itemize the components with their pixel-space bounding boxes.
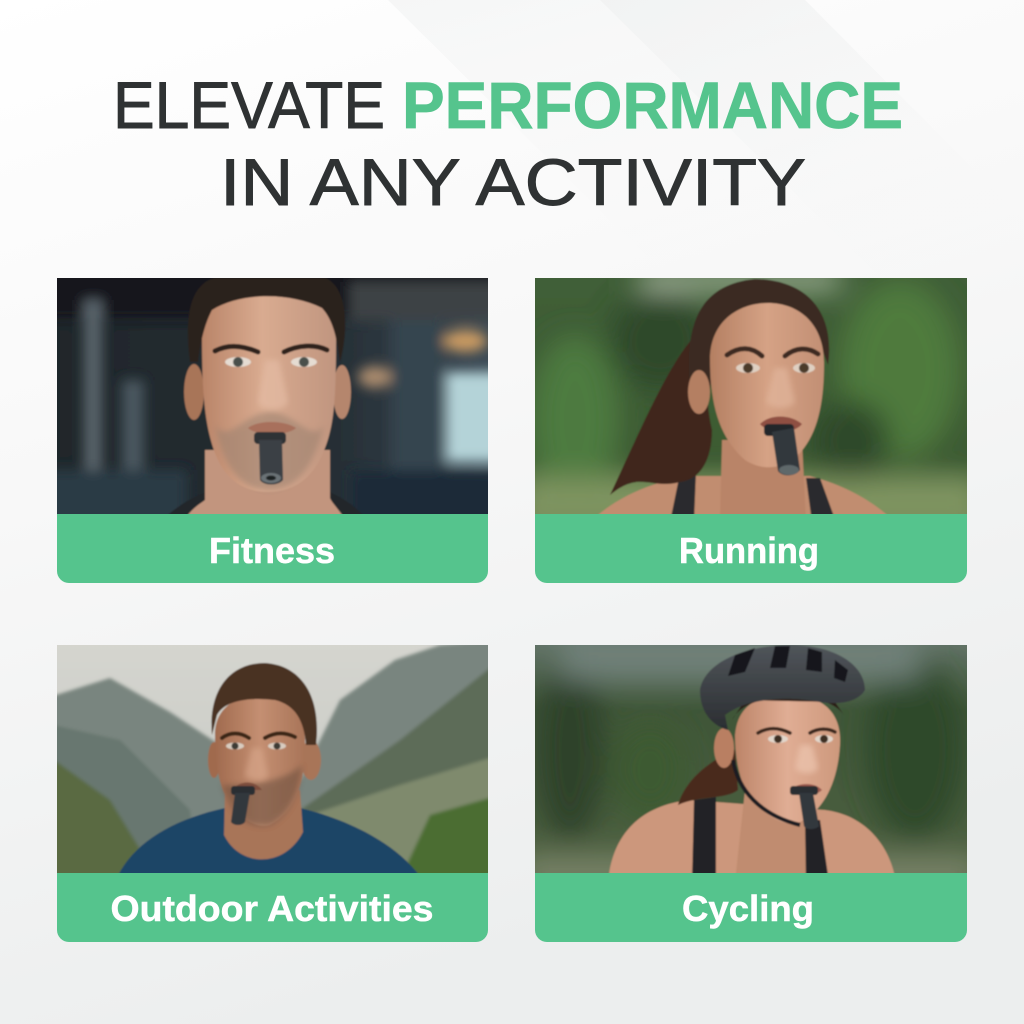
label bar: outdoor activities	[57, 873, 488, 942]
title: IN ANY ACTIVITY	[220, 145, 806, 219]
panel: fitness	[57, 278, 488, 583]
panel: running	[520, 268, 980, 583]
label bar: outdoor activities: Outdoor Activities	[110, 888, 434, 929]
label bar: fitness: Fitness	[209, 530, 335, 571]
panel: cycling	[535, 645, 967, 942]
photo: man in gym	[57, 278, 488, 514]
title: PERFORMANCE	[402, 68, 903, 142]
title: ELEVATE	[113, 68, 385, 142]
label bar: fitness	[57, 514, 488, 583]
photo: woman cyclist with helmet	[535, 645, 967, 873]
label bar: cycling: Cycling	[682, 888, 814, 929]
title	[113, 68, 903, 219]
label bar: running	[535, 514, 967, 583]
photo: woman running	[535, 278, 967, 514]
label bar: cycling	[535, 873, 967, 942]
panel: outdoor activities	[40, 635, 500, 942]
photo: man in mountains	[57, 645, 488, 873]
label bar: running: Running	[679, 530, 819, 571]
